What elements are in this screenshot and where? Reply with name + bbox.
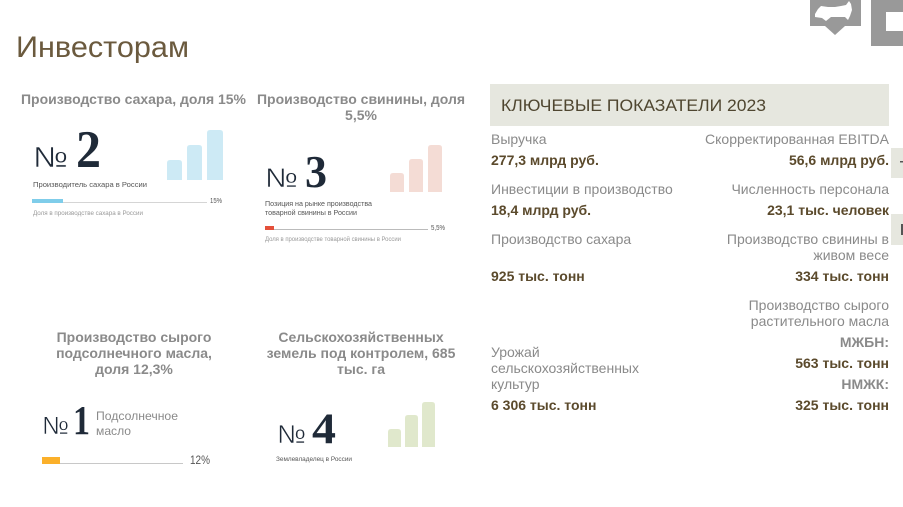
panel: sunflower oil (42, 329, 212, 467)
pork production (727, 231, 889, 284)
investments (491, 181, 673, 218)
heading: pork (257, 91, 465, 123)
key indicators header (490, 84, 889, 126)
rank number 2 (33, 121, 101, 179)
panel: sugar (21, 91, 247, 217)
heading: sugar: Производство сахара, доля 15% (21, 91, 247, 107)
pork caption: Доля в производстве товарной свинины в России (265, 236, 402, 243)
crop harvest: сельскохозяйственных (491, 360, 639, 376)
oil label: масло (96, 424, 131, 438)
heading: pork: Производство свинины, доля (257, 91, 465, 107)
staff: 23,1 тыс. человек (767, 202, 890, 218)
crude oil production: 563 тыс. тонн (795, 355, 889, 371)
staff (731, 181, 890, 218)
revenue (491, 131, 599, 168)
crop harvest: 6 306 тыс. тонн (491, 397, 596, 413)
crop harvest: Урожай (491, 344, 540, 360)
sugar label: Производитель сахара в России (33, 180, 147, 189)
pork label: Позиция на рынке производства (265, 199, 372, 208)
staff: Численность персонала (731, 181, 889, 197)
heading: land: Сельскохозяйственных (278, 329, 444, 345)
sugar production: Производство сахара (491, 231, 631, 247)
rank number 1 (42, 397, 90, 443)
investments: Инвестиции в производство (491, 181, 673, 197)
heading: land: земель под контролем, 685 (267, 345, 456, 361)
rank number 4: 4 (312, 406, 336, 453)
side tab upper (891, 148, 903, 178)
rank number 2: № (33, 142, 68, 174)
EBITDA: 56,6 млрд руб. (789, 152, 889, 168)
rank number 1: 1 (73, 397, 90, 443)
icon: Russia map tab (810, 0, 861, 35)
rank number 4 (277, 406, 336, 453)
panel: farmland (267, 329, 456, 463)
progress bar: sugar 15% (32, 198, 222, 205)
rank number 2: 2 (76, 121, 101, 179)
heading: oil: Производство сырого (57, 329, 211, 345)
crop harvest: культур (491, 376, 540, 392)
crude oil production: растительного масла (751, 313, 889, 329)
progress bar: oil 12% (42, 453, 210, 467)
side tab lower (891, 214, 903, 245)
crude oil production: НМЖК: (841, 376, 889, 392)
revenue: Выручка (491, 131, 547, 147)
bar icon: land (388, 402, 435, 447)
heading: oil (56, 329, 212, 377)
sugar production: 925 тыс. тонн (491, 268, 585, 284)
oil label: Подсолнечное (96, 409, 178, 423)
pork label (265, 199, 372, 217)
progress bar: sugar 15%: 15% (210, 198, 222, 205)
panel: pork (257, 91, 465, 243)
pork production: Производство свинины в (727, 231, 889, 247)
crude oil production (749, 297, 889, 413)
key indicators header: КЛЮЧЕВЫЕ ПОКАЗАТЕЛИ 2023 (501, 97, 766, 115)
rank number 3 (265, 146, 327, 197)
revenue: 277,3 млрд руб. (491, 152, 599, 168)
heading: land: тыс. га (337, 361, 385, 377)
investments: 18,4 млрд руб. (491, 202, 591, 218)
EBITDA (705, 131, 890, 168)
rank number 3: 3 (305, 146, 327, 197)
progress bar: pork 5.5%: 5,5% (431, 225, 445, 232)
pork label: товарной свинины в России (265, 208, 357, 217)
EBITDA: Скорректированная EBITDA (705, 131, 890, 147)
rank number 4: № (277, 419, 306, 449)
bar icon: pork (390, 145, 442, 192)
heading: pork: 5,5% (345, 107, 378, 123)
crude oil production: МЖБН: (840, 334, 889, 350)
rank number 1: № (42, 412, 69, 440)
title: Инвесторам (16, 31, 189, 64)
icon: square tab (871, 0, 903, 46)
sugar caption: Доля в производстве сахара в России (33, 211, 143, 217)
oil label (96, 409, 178, 438)
heading: oil: подсолнечного масла, (56, 345, 212, 361)
sugar production (491, 231, 631, 284)
crop harvest (491, 344, 639, 413)
crude oil production: Производство сырого (749, 297, 889, 313)
progress bar: oil 12%: 12% (190, 453, 210, 467)
heading: oil: доля 12,3% (95, 361, 173, 377)
pork production: 334 тыс. тонн (795, 268, 889, 284)
rank number 3: № (265, 163, 298, 193)
bar icon: sugar (167, 130, 223, 180)
progress bar: pork 5.5% (265, 225, 445, 232)
land label: Землевладелец в России (276, 456, 352, 463)
heading: land (267, 329, 456, 377)
pork production: живом весе (813, 247, 889, 263)
panel: key indicators (490, 84, 890, 413)
crude oil production: 325 тыс. тонн (795, 397, 889, 413)
